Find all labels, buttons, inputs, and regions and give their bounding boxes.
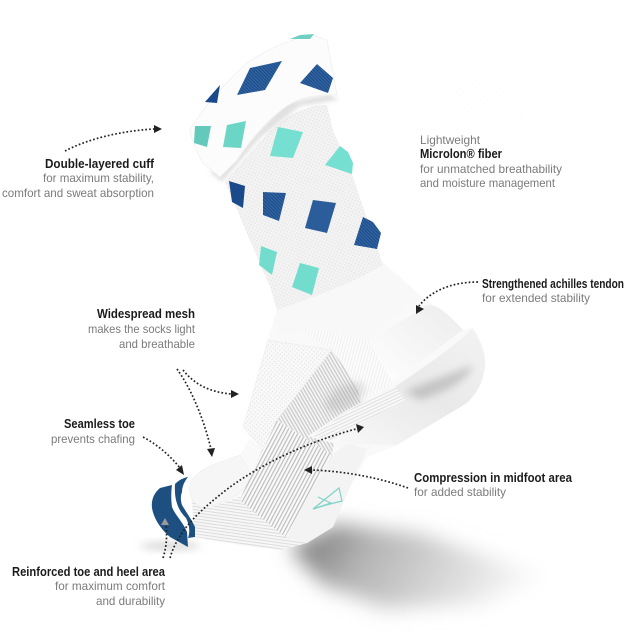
text: microlon fiber: Microlon® fiber	[420, 147, 502, 161]
text: microlon fiber	[420, 133, 562, 190]
text: reinforced toe and heel	[12, 565, 166, 608]
text: achilles tendon	[482, 277, 624, 305]
logo mark	[313, 488, 342, 509]
faint fiber texture behind Microlon text	[420, 60, 536, 241]
leg	[225, 105, 383, 310]
arrow: mesh lower	[177, 369, 215, 457]
text: achilles tendon: for extended stability	[482, 291, 590, 305]
central ribbed instep	[285, 322, 393, 403]
cuff	[190, 35, 337, 177]
text: widespread mesh	[88, 307, 196, 351]
text: double-layered cuff: Double-layered cuff	[45, 157, 155, 171]
toe cap white	[190, 455, 250, 508]
arrow: seamless toe	[143, 437, 184, 475]
text: reinforced toe and heel: Reinforced toe and heel area	[12, 565, 166, 579]
arrow: mesh upper	[183, 370, 239, 398]
arrow: compression	[304, 466, 408, 488]
arrow: double-layered cuff	[65, 125, 162, 151]
text: microlon fiber: for unmatched breathability	[420, 162, 562, 176]
text: compression	[414, 471, 573, 499]
cuff shadow	[210, 94, 338, 182]
arch side	[285, 443, 367, 543]
leg diamonds	[229, 127, 381, 295]
arrow: reinforced heel	[170, 424, 364, 558]
text: seamless toe: Seamless toe	[64, 417, 135, 431]
text: microlon fiber: and moisture management	[420, 176, 556, 190]
sock foot and heel base	[190, 262, 485, 550]
text: seamless toe: prevents chafing	[51, 432, 135, 446]
text: double-layered cuff: for maximum stability,	[43, 171, 154, 185]
ground shadow	[290, 524, 545, 608]
compression panel	[240, 420, 332, 537]
forefoot rib shading	[277, 350, 362, 455]
blue toe reinforcement	[152, 477, 195, 547]
cuff diamonds	[194, 34, 333, 148]
text: widespread mesh: Widespread mesh	[97, 307, 195, 321]
text: double-layered cuff: comfort and sweat absorption	[2, 186, 154, 200]
heel rib lines	[312, 387, 405, 440]
text: widespread mesh: and breathable	[119, 337, 195, 351]
instep upper shade	[277, 265, 420, 340]
text: compression: for added stability	[414, 485, 506, 499]
achilles panel	[368, 305, 463, 383]
heel pad dark cushion	[405, 365, 472, 400]
mesh flap	[243, 340, 332, 450]
forefoot sole ribs	[192, 497, 307, 550]
text: compression: Compression in midfoot area	[414, 471, 573, 485]
forefoot dark accent	[320, 376, 370, 418]
text: reinforced toe and heel: for maximum comfort	[55, 579, 166, 593]
arrow: reinforced toe	[161, 518, 169, 558]
text: double-layered cuff	[2, 157, 155, 200]
text: reinforced toe and heel: and durability	[96, 594, 165, 608]
sock illustration	[140, 34, 485, 550]
text: microlon fiber: Lightweight	[420, 133, 481, 147]
arrow: achilles tendon	[416, 282, 478, 314]
toe shadow	[140, 542, 200, 550]
text: seamless toe	[51, 417, 135, 446]
heel pad	[308, 328, 485, 445]
text: widespread mesh: makes the socks light	[88, 322, 196, 336]
